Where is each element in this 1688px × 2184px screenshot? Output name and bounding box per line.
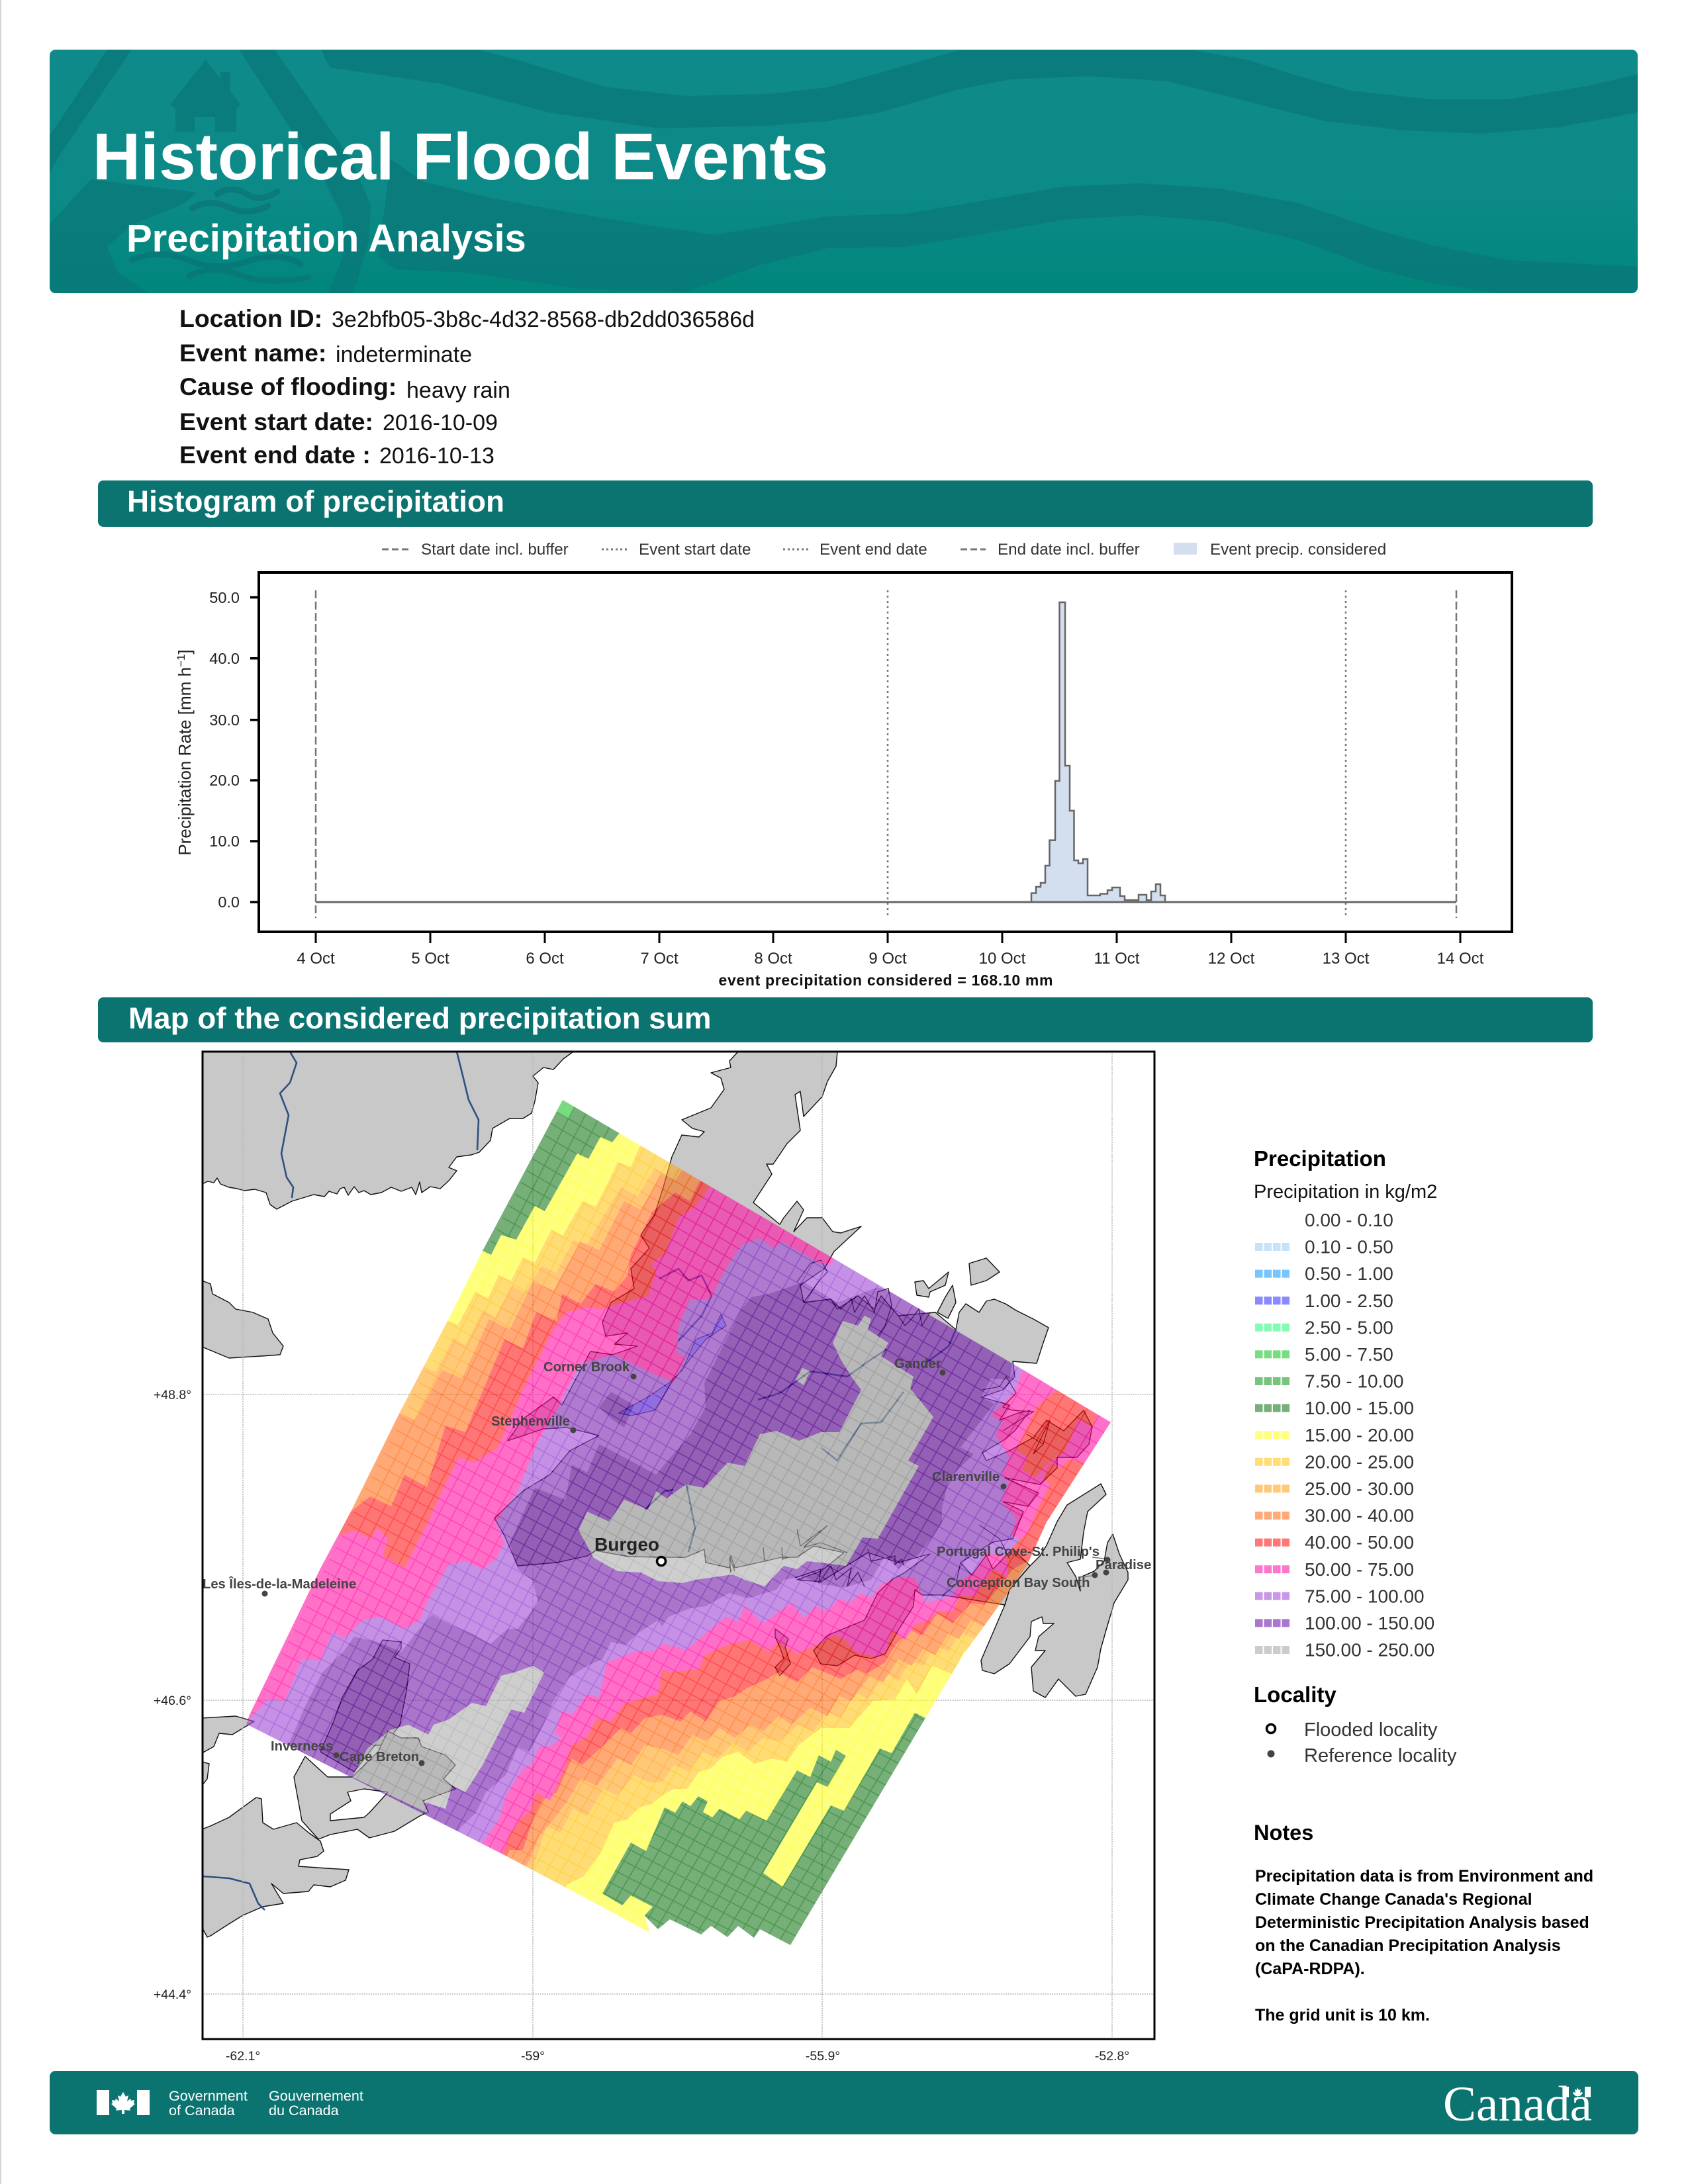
event metadata: indeterminate — [336, 342, 472, 367]
locality labels — [203, 1357, 1151, 1766]
band: 20-25 — [424, 1145, 976, 1888]
legend labels: 10.00 - 15.00 — [1305, 1398, 1414, 1418]
legend labels: 75.00 - 100.00 — [1305, 1586, 1425, 1606]
legend labels: 1.00 - 2.50 — [1305, 1291, 1393, 1311]
event metadata: Event start date: — [179, 408, 373, 435]
event metadata: 2016-10-13 — [379, 443, 494, 469]
flooded locality: Burgeo: Burgeo — [594, 1534, 659, 1555]
y axis title: −1 — [175, 655, 187, 667]
locality labels: Paradise — [1096, 1558, 1151, 1572]
legend: locality: Flooded locality — [1304, 1719, 1438, 1741]
locality labels: Cape Breton — [340, 1750, 419, 1764]
locality labels: Stephenville — [491, 1414, 570, 1429]
y axis title: Precipitation Rate [mm h — [175, 667, 195, 856]
x axis: 9 Oct — [868, 950, 907, 968]
event metadata: 3e2bfb05-3b8c-4d32-8568-db2dd036586d — [332, 307, 755, 332]
legend labels: 2.50 - 5.00 — [1305, 1317, 1393, 1338]
x axis: 11 Oct — [1094, 950, 1140, 968]
y axis: 30.0 — [209, 711, 240, 729]
histogram legend — [382, 541, 1386, 559]
legend labels: 20.00 - 25.00 — [1305, 1451, 1414, 1472]
legend labels: 50.00 - 75.00 — [1305, 1559, 1414, 1580]
legend labels: 0.00 - 0.10 — [1305, 1210, 1393, 1230]
notes — [1254, 1821, 1593, 2025]
date marker lines — [316, 590, 1456, 918]
histogram chart — [175, 572, 1512, 989]
event metadata: Cause of flooding: — [179, 373, 397, 400]
band: 40-50 — [338, 1181, 1085, 1856]
histogram legend: End date incl. buffer — [998, 541, 1140, 559]
lakes — [619, 1314, 726, 1416]
y axis — [209, 589, 258, 911]
event metadata: heavy rain — [406, 378, 510, 403]
latitude labels: +48.8° — [154, 1388, 191, 1402]
latitude labels — [154, 1388, 191, 2002]
band: 10-15 — [483, 1100, 925, 1945]
government signature: du Canada — [269, 2102, 340, 2118]
longitude labels: -52.8° — [1095, 2049, 1129, 2064]
flooded locality: Burgeo — [594, 1534, 666, 1566]
y axis: 0.0 — [218, 893, 240, 911]
y axis: 50.0 — [209, 589, 240, 606]
legend labels: 25.00 - 30.00 — [1305, 1479, 1414, 1499]
legend swatches — [1255, 1247, 1289, 1650]
precipitation steps — [1031, 602, 1165, 902]
header watermark: flood house emblem and waves — [50, 50, 1638, 293]
locality labels: Gander — [894, 1357, 941, 1371]
band: 30-40 — [351, 1170, 1029, 1866]
y axis: 10.0 — [209, 833, 240, 850]
legend labels: 30.00 - 40.00 — [1305, 1506, 1414, 1526]
notes: Notes — [1254, 1821, 1313, 1844]
latitude labels: +44.4° — [154, 1987, 191, 2002]
band: 75-100 — [232, 1238, 1033, 1866]
band: 150-250 — [579, 1316, 933, 1586]
section bar: map: Map of the considered precipitation sum — [128, 1001, 711, 1035]
event metadata: 2016-10-09 — [383, 410, 498, 435]
notes: Precipitation data is from Environment and — [1255, 1867, 1593, 1886]
x axis: 4 Oct — [297, 950, 335, 968]
event metadata — [179, 304, 755, 469]
y axis: 40.0 — [209, 650, 240, 667]
legend: precipitation — [1254, 1146, 1437, 1661]
band: 100-150 — [265, 1282, 1013, 1846]
legend: locality: Reference locality — [1304, 1745, 1457, 1766]
x axis: 12 Oct — [1208, 950, 1255, 968]
government signature — [97, 2087, 363, 2118]
section bar: map — [98, 997, 1593, 1042]
legend labels — [1305, 1210, 1434, 1661]
band: 7.5-10 corner cell — [557, 1100, 575, 1118]
legend labels: 15.00 - 20.00 — [1305, 1425, 1414, 1445]
x axis: 5 Oct — [411, 950, 449, 968]
legend: precipitation: Precipitation — [1254, 1146, 1386, 1171]
longitude labels: -59° — [521, 2049, 545, 2064]
rivers — [202, 1052, 956, 1910]
longitude labels: -62.1° — [226, 2049, 260, 2064]
section bar: histogram — [98, 480, 1593, 527]
y axis title: ] — [175, 649, 195, 655]
locality labels: Corner Brook — [543, 1360, 630, 1375]
legend labels: 150.00 - 250.00 — [1305, 1640, 1434, 1661]
event precipitation total: event precipitation considered = 168.10 mm — [719, 972, 1053, 989]
government signature: Gouvernement — [269, 2087, 363, 2104]
band: 25-30 — [400, 1163, 1001, 1870]
latitude labels: +46.6° — [154, 1694, 191, 1708]
subtitle: Precipitation Analysis — [126, 217, 526, 260]
legend: locality: Locality — [1254, 1682, 1336, 1707]
event metadata: Event name: — [179, 339, 326, 367]
footer bar — [50, 2071, 1638, 2134]
event metadata: Event end date : — [179, 441, 371, 469]
header banner — [50, 50, 1638, 293]
legend labels: 40.00 - 50.00 — [1305, 1532, 1414, 1553]
coastal fjord detail — [729, 1260, 1050, 1596]
locality labels: Portugal Cove-St. Philip's — [937, 1545, 1100, 1559]
legend: locality — [1254, 1682, 1457, 1766]
notes: (CaPA-RDPA). — [1255, 1960, 1365, 1978]
section bar: histogram: Histogram of precipitation — [127, 484, 504, 518]
histogram legend: Event end date — [820, 541, 927, 559]
x axis: 10 Oct — [979, 950, 1026, 968]
legend labels: 5.00 - 7.50 — [1305, 1344, 1393, 1365]
government signature: of Canada — [169, 2102, 236, 2118]
histogram legend: Event start date — [639, 541, 751, 559]
notes: on the Canadian Precipitation Analysis — [1255, 1936, 1561, 1955]
grid cells — [252, 1107, 1104, 1984]
legend labels: 100.00 - 150.00 — [1305, 1613, 1434, 1633]
notes: The grid unit is 10 km. — [1255, 2006, 1430, 2025]
legend: precipitation: Precipitation in kg/m2 — [1254, 1181, 1437, 1203]
graticule — [204, 1054, 1153, 2038]
locality labels: Clarenville — [932, 1470, 1000, 1484]
map frame — [203, 1052, 1154, 2039]
notes: Climate Change Canada's Regional — [1255, 1890, 1532, 1909]
precipitation bands — [246, 1100, 1111, 1945]
notes: Deterministic Precipitation Analysis based — [1255, 1913, 1589, 1932]
land masses — [202, 1052, 1128, 1937]
band: 50-75 — [247, 1186, 1111, 1854]
band: eastern 40-50 block — [1016, 1390, 1098, 1478]
longitude labels: -55.9° — [806, 2049, 840, 2064]
x axis: 8 Oct — [754, 950, 792, 968]
x axis: 6 Oct — [526, 950, 564, 968]
histogram legend: Event precip. considered — [1210, 541, 1386, 559]
government signature: Government — [169, 2087, 248, 2104]
locality labels: Inverness — [271, 1739, 333, 1754]
title: Historical Flood Events — [93, 120, 828, 194]
x axis — [297, 933, 1484, 968]
x axis: 7 Oct — [640, 950, 679, 968]
locality labels: Conception Bay South — [947, 1576, 1090, 1590]
locality labels: Les Îles-de-la-Madeleine — [203, 1576, 356, 1592]
Canada wordmark: Canada — [1443, 2077, 1592, 2132]
legend labels: 7.50 - 10.00 — [1305, 1371, 1403, 1392]
x axis: 13 Oct — [1323, 950, 1370, 968]
map panel — [154, 1052, 1165, 2064]
band: 15-20 — [447, 1133, 966, 1933]
histogram legend: Start date incl. buffer — [421, 541, 569, 559]
longitude labels — [226, 2049, 1129, 2064]
event metadata: Location ID: — [179, 304, 322, 332]
x axis: 14 Oct — [1437, 950, 1484, 968]
legend labels: 0.50 - 1.00 — [1305, 1263, 1393, 1284]
y axis: 20.0 — [209, 772, 240, 789]
legend labels: 0.10 - 0.50 — [1305, 1237, 1393, 1257]
